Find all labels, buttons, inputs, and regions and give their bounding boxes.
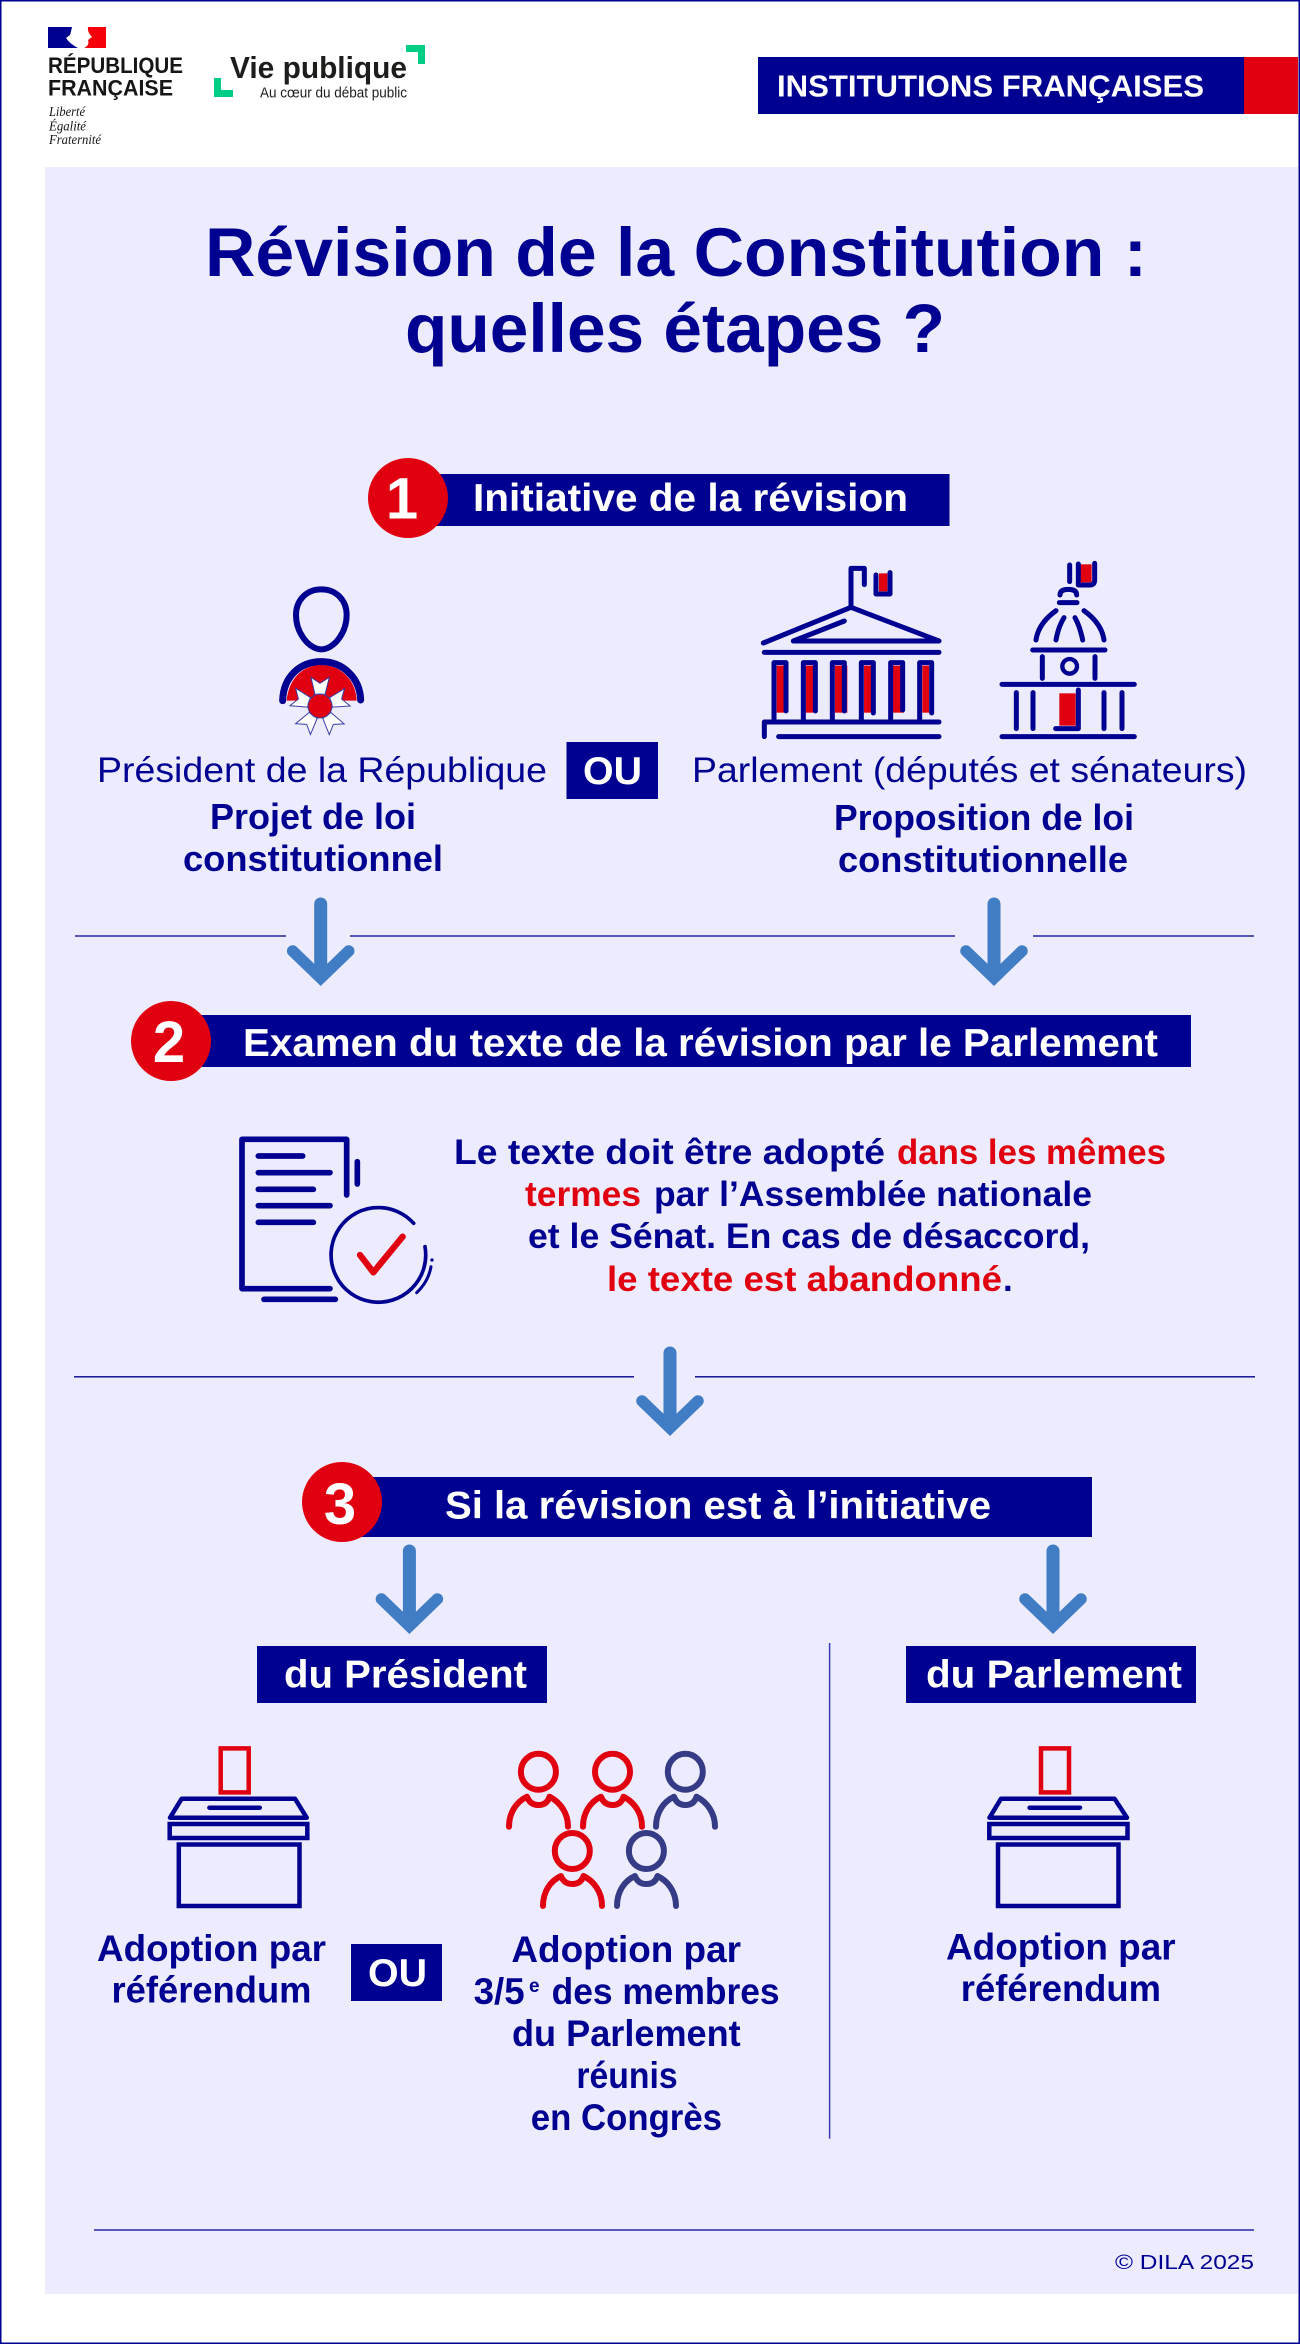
badge: OU: OU: [583, 750, 642, 793]
step 3 heading: Si la révision est à l’initiative: [445, 1485, 991, 1528]
banner: Institutions françaises: [758, 57, 1298, 114]
text: adoption par référendum, President branch: référendum: [112, 1970, 312, 2011]
text: adoption par référendum, Parliament branch: référendum: [961, 1968, 1161, 2009]
logo: République française: Liberté: [48, 105, 86, 120]
step 2 heading: Examen du texte de la révision par le Parlement: [243, 1022, 1158, 1065]
icon: Assemblée nationale: [763, 568, 939, 737]
text: Projet de loi constitutionnel: constitutionnel: [183, 838, 443, 879]
text: Projet de loi constitutionnel: Projet de loi: [210, 796, 416, 837]
heading: du Président: du Président: [284, 1654, 527, 1697]
icon: document with check mark: [242, 1139, 434, 1302]
logo: République française: RÉPUBLIQUE: [48, 53, 183, 78]
badge: OU: [566, 742, 658, 799]
text: adoption conditions: par l’Assemblée nationale: [654, 1175, 1092, 1214]
heading: du Parlement: du Parlement: [926, 1654, 1182, 1697]
text: adoption par 3/5e des membres du Parlement: des membres: [552, 1971, 780, 2012]
text: adoption conditions: et le Sénat. En cas de désaccord,: [528, 1217, 1090, 1256]
text: adoption conditions: [454, 1133, 1166, 1299]
text: adoption par 3/5e des membres du Parlement: e: [529, 1976, 540, 1997]
icon: ballot box, Parliament branch: [989, 1748, 1128, 1906]
logo: Vie publique: Vie publique: [230, 50, 407, 85]
step 3 heading: 3: [324, 1472, 356, 1537]
step 1 heading: [368, 458, 950, 538]
step 1 heading: Initiative de la révision: [473, 477, 908, 520]
step 2 heading: 2: [153, 1010, 185, 1075]
icon: ballot box, President branch: [170, 1748, 307, 1906]
text: adoption par référendum, President branch: Adoption par: [97, 1928, 326, 1969]
title: quelles étapes ?: [405, 290, 945, 367]
text: adoption conditions: le texte est abandonné: [607, 1260, 1002, 1299]
icon: group of parliament members: [509, 1754, 715, 1906]
logo: République française: Égalité: [48, 118, 87, 134]
member 2: [583, 1754, 642, 1827]
text: Proposition de loi constitutionnelle: constitutionnelle: [838, 839, 1128, 880]
banner: Institutions françaises: INSTITUTIONS FRANÇAISES: [777, 69, 1204, 104]
heading: du Président: [257, 1646, 547, 1703]
arrow: Parliament to step 2: [966, 904, 1022, 978]
member 1: [509, 1754, 568, 1827]
text: adoption par référendum, Parliament branch: Adoption par: [946, 1926, 1176, 1968]
title: Révision de la Constitution :: [205, 214, 1147, 291]
text: Projet de loi constitutionnel: [183, 796, 443, 879]
badge: OU: [351, 1944, 442, 2001]
icon: President with medal: [283, 589, 361, 735]
text: adoption par 3/5e des membres du Parlement: en Congrès: [531, 2097, 722, 2138]
text: adoption conditions: dans les mêmes: [897, 1133, 1166, 1172]
text: adoption conditions: .: [1003, 1260, 1013, 1299]
text: Président de la République: Président de la République: [97, 751, 547, 790]
heading: du Parlement: [906, 1646, 1196, 1703]
title: [205, 214, 1147, 367]
logo: République française: FRANÇAISE: [48, 76, 173, 100]
text: adoption par référendum, President branch: [97, 1928, 326, 2011]
logo: Vie publique: Au cœur du débat public: [260, 84, 407, 102]
text: Parlement (députés et sénateurs): Parlement (députés et sénateurs): [692, 751, 1247, 790]
member 3: [656, 1754, 715, 1827]
arrow: to President branch: [381, 1551, 437, 1626]
logo: République française: [48, 27, 183, 148]
text: Proposition de loi constitutionnelle: Proposition de loi: [834, 797, 1134, 838]
text: adoption par 3/5e des membres du Parlement: 3/5: [474, 1971, 525, 2012]
member 4: [543, 1833, 602, 1906]
logo: République française: Fraternité: [48, 133, 102, 148]
text: adoption conditions: Le texte doit être adopté: [454, 1133, 885, 1172]
icon: Marianne flag: [48, 27, 106, 48]
arrow: President to step 2: [293, 904, 349, 978]
arrow: to Parliament branch: [1025, 1551, 1081, 1626]
icon: Parliament buildings: [763, 563, 1134, 737]
step 1 heading: 1: [386, 466, 418, 532]
text: adoption conditions: termes: [525, 1175, 641, 1214]
credit: © DILA 2025: [1115, 2252, 1254, 2274]
logo: Vie publique: [214, 45, 425, 102]
arrow: step 2 to step 3: [642, 1353, 698, 1428]
step 3 heading: [302, 1462, 1092, 1542]
icon: Sénat: [1002, 563, 1134, 737]
badge: OU: OU: [368, 1952, 427, 1995]
text: adoption par 3/5e des membres du Parlement: réunis: [576, 2055, 678, 2096]
text: adoption par 3/5e des membres du Parlement: Adoption par: [511, 1929, 741, 1970]
text: adoption par référendum, Parliament branch: [946, 1926, 1176, 2009]
text: adoption par 3/5e des membres du Parlement: du Parlement: [512, 2013, 741, 2054]
step 2 heading: [131, 1001, 1191, 1081]
text: adoption par 3/5e des membres du Parlement: [474, 1929, 780, 2138]
text: Proposition de loi constitutionnelle: [834, 797, 1134, 880]
member 5: [617, 1833, 676, 1906]
